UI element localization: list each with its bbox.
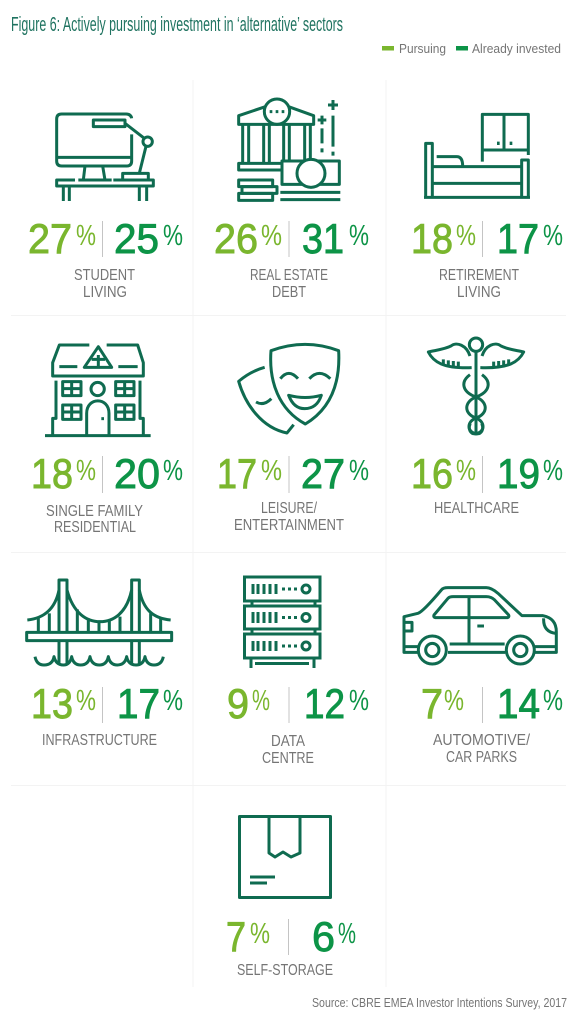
- value: already invested 25%: %: [163, 220, 183, 252]
- label: [234, 500, 344, 534]
- value: already invested 6%: 6: [312, 913, 335, 960]
- label: LIVING: [83, 284, 127, 301]
- value: already invested 19%: 19: [497, 450, 540, 497]
- value: pursuing 26%: [214, 215, 282, 262]
- value: already invested 17%: 17: [497, 215, 539, 262]
- value: already invested 14%: %: [543, 685, 563, 717]
- value: already invested 14%: 14: [497, 680, 540, 727]
- value: already invested 27%: %: [349, 455, 369, 487]
- value: pursuing 7%: %: [444, 685, 464, 717]
- value: already invested 31%: %: [349, 220, 369, 252]
- label: AUTOMOTIVE/: [433, 732, 531, 749]
- value: already invested 12%: %: [349, 685, 369, 717]
- value: already invested 17%: %: [543, 220, 563, 252]
- panel: leisure/entertainment: [217, 344, 369, 534]
- panel: retirement living: [411, 114, 563, 301]
- panel: single family residential: [31, 345, 183, 536]
- panel: self-storage: [226, 816, 356, 979]
- label: CENTRE: [262, 750, 314, 767]
- panel: healthcare: [411, 338, 563, 517]
- panel: automotive/car parks: [404, 588, 563, 766]
- value: pursuing 27%: [28, 215, 96, 262]
- label: HEALTHCARE: [434, 500, 519, 517]
- value: pursuing 9%: [227, 680, 270, 727]
- label: RETIREMENT: [439, 267, 519, 284]
- label: LEISURE/: [261, 500, 318, 517]
- icon: theatre masks: [239, 344, 339, 433]
- label: [439, 267, 519, 301]
- label: ENTERTAINMENT: [234, 517, 344, 534]
- legend: [382, 41, 561, 56]
- value: pursuing 18%: %: [456, 220, 476, 252]
- value: pursuing 7%: 7: [226, 913, 246, 960]
- value: already invested 25%: 25: [114, 215, 159, 262]
- value: pursuing 7%: %: [250, 918, 270, 950]
- value: pursuing 7%: 7: [421, 680, 443, 727]
- label: CAR PARKS: [446, 749, 517, 766]
- value: already invested 25%: [114, 215, 183, 262]
- label: [250, 267, 328, 301]
- value: pursuing 27%: %: [76, 220, 96, 252]
- panel: real estate debt: [214, 99, 369, 301]
- icon: bank, banknote and books: [239, 99, 340, 200]
- label: SELF-STORAGE: [237, 962, 333, 979]
- icon: house: [45, 345, 151, 436]
- value: pursuing 27%: 27: [28, 215, 72, 262]
- icon: bed and wardrobe: [424, 114, 530, 197]
- value: pursuing 16%: 16: [411, 450, 453, 497]
- icon: caduceus: [428, 338, 524, 435]
- icon: server rack: [244, 577, 320, 668]
- value: already invested 31%: 31: [302, 215, 344, 262]
- value: already invested 27%: [301, 450, 369, 497]
- value: pursuing 16%: %: [456, 455, 476, 487]
- value: pursuing 18%: %: [76, 455, 96, 487]
- value: pursuing 7%: [421, 680, 464, 727]
- label: STUDENT: [74, 267, 135, 284]
- icon: desk with computer and lamp: [57, 114, 153, 201]
- value: pursuing 17%: %: [261, 455, 282, 487]
- value: already invested 31%: [302, 215, 369, 262]
- panel: student living: [28, 114, 183, 301]
- value: already invested 27%: 27: [301, 450, 345, 497]
- value: already invested 20%: %: [163, 455, 183, 487]
- label: SINGLE FAMILY: [46, 503, 143, 520]
- label: [433, 732, 531, 766]
- value: pursuing 26%: 26: [214, 215, 258, 262]
- label: [262, 733, 314, 767]
- label: [46, 503, 143, 536]
- icon: cardboard box: [240, 816, 330, 898]
- icon: suspension bridge: [27, 580, 172, 665]
- value: pursuing 18%: 18: [31, 450, 73, 497]
- panel: data centre: [227, 577, 369, 767]
- title: Figure 6: Actively pursuing investment in ‘alternative’ sectors: [11, 14, 343, 36]
- label: LIVING: [457, 284, 501, 301]
- value: already invested 17%: %: [163, 685, 183, 717]
- icon: car: [404, 588, 556, 664]
- value: already invested 6%: %: [338, 918, 356, 950]
- label: INFRASTRUCTURE: [42, 732, 157, 749]
- value: pursuing 7%: [226, 913, 270, 960]
- value: already invested 20%: 20: [114, 450, 160, 497]
- panel: infrastructure: [27, 580, 183, 749]
- legend: Already invested: [472, 41, 561, 56]
- label: DEBT: [272, 284, 306, 301]
- legend: Pursuing: [399, 41, 446, 56]
- value: already invested 20%: [114, 450, 183, 497]
- value: already invested 19%: %: [543, 455, 563, 487]
- value: already invested 6%: [312, 913, 356, 960]
- value: pursuing 13%: 13: [31, 680, 73, 727]
- label: REAL ESTATE: [250, 267, 328, 284]
- value: pursuing 17%: 17: [217, 450, 257, 497]
- label: [74, 267, 135, 301]
- label: DATA: [271, 733, 306, 750]
- value: pursuing 18%: 18: [411, 215, 453, 262]
- value: pursuing 13%: %: [76, 685, 96, 717]
- value: already invested 17%: 17: [117, 680, 160, 727]
- value: pursuing 9%: %: [252, 685, 270, 717]
- value: pursuing 9%: 9: [227, 680, 249, 727]
- value: pursuing 26%: %: [261, 220, 282, 252]
- value: already invested 12%: 12: [304, 680, 345, 727]
- label: RESIDENTIAL: [54, 519, 136, 536]
